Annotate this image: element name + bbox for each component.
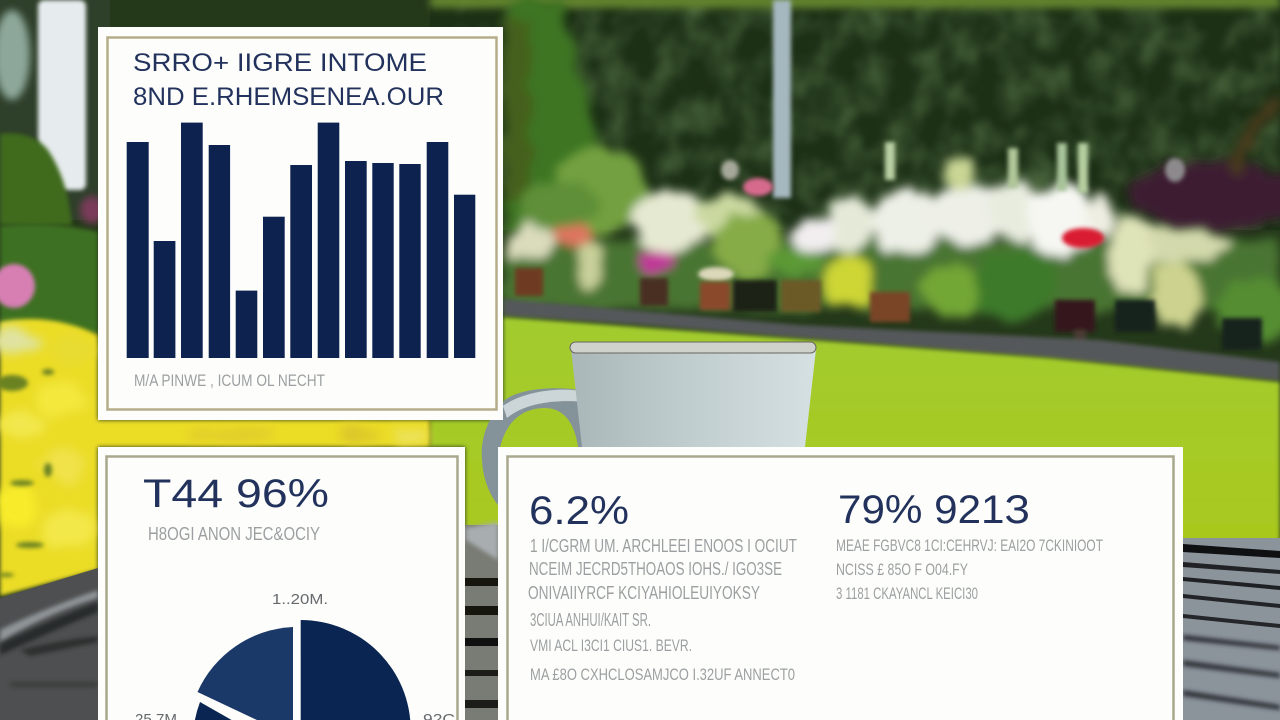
left statistic body text: 3CIUA ANHUI/KAIT SR. — [530, 610, 651, 630]
left statistic body text: ONIVAIIYRCF KCIYAHIOLEUIYOKSY — [528, 583, 760, 603]
pie label: top: 1..20M. — [272, 591, 328, 608]
left statistic: 6.2% — [529, 489, 629, 533]
yellow flowers — [0, 319, 430, 596]
dark purple shrubs — [1130, 90, 1280, 229]
panel: statistics card — [498, 447, 1183, 720]
left statistic body text: MA £8O CXHCLOSAMJCO I.32UF ANNECT0 — [530, 665, 795, 684]
mug rim — [570, 342, 816, 353]
flower pots — [515, 268, 1262, 358]
chart caption: M/A PINWE , ICUM OL NECHT — [134, 371, 325, 390]
conifer — [505, 0, 605, 230]
mug handle — [482, 388, 594, 505]
right statistic body text — [836, 536, 1103, 603]
right statistic body text: MEAE FGBVC8 1CI:CEHRVJ: EAI2O 7CKINIOOT — [836, 536, 1103, 555]
paved path — [503, 299, 1280, 381]
pie chart — [193, 620, 411, 720]
right statistic body text: NCISS £ 85O F O04.FY — [836, 560, 968, 579]
left statistic body text: NCEIM JECRD5THOAOS IOHS./ IGO3SE — [529, 559, 782, 579]
right statistic — [836, 488, 1103, 603]
left column post and shrubs — [0, 0, 110, 335]
panel: bar chart card — [98, 27, 503, 420]
left statistic — [528, 489, 797, 684]
bar chart — [127, 123, 475, 358]
flower bed — [505, 145, 1280, 342]
table, right — [1183, 538, 1280, 720]
heading: chart title — [133, 49, 444, 111]
table, centre — [465, 522, 500, 720]
left statistic body text: 1 I/CGRM UM. ARCHLEEI ENOOS I OCIUT — [530, 536, 797, 556]
flower spikes and bright blooms — [698, 142, 1185, 281]
pole — [773, 0, 791, 198]
mug body — [571, 349, 816, 447]
stat heading: T44 96% — [143, 472, 329, 516]
table, left — [0, 568, 98, 720]
lawn — [430, 317, 1280, 545]
left statistic body text: VMI ACL I3CI1 CIUS1. BEVR. — [530, 636, 692, 655]
right statistic: 79% 921З — [838, 488, 1030, 532]
hedge — [430, 0, 1280, 230]
left statistic body text — [528, 536, 797, 684]
icon: coffee mug — [482, 342, 816, 505]
right statistic body text: 3 1181 CKAYANCL KEICI30 — [836, 584, 978, 603]
panel: pie chart card — [98, 447, 465, 720]
stat subtext: H8OGI ANON JEC&OCIY — [148, 524, 320, 544]
heading: chart title: SRRO+ IIGRE INTOME — [133, 49, 427, 77]
heading: chart title: 8ND E.RHEMSENEA.OUR — [133, 83, 444, 111]
